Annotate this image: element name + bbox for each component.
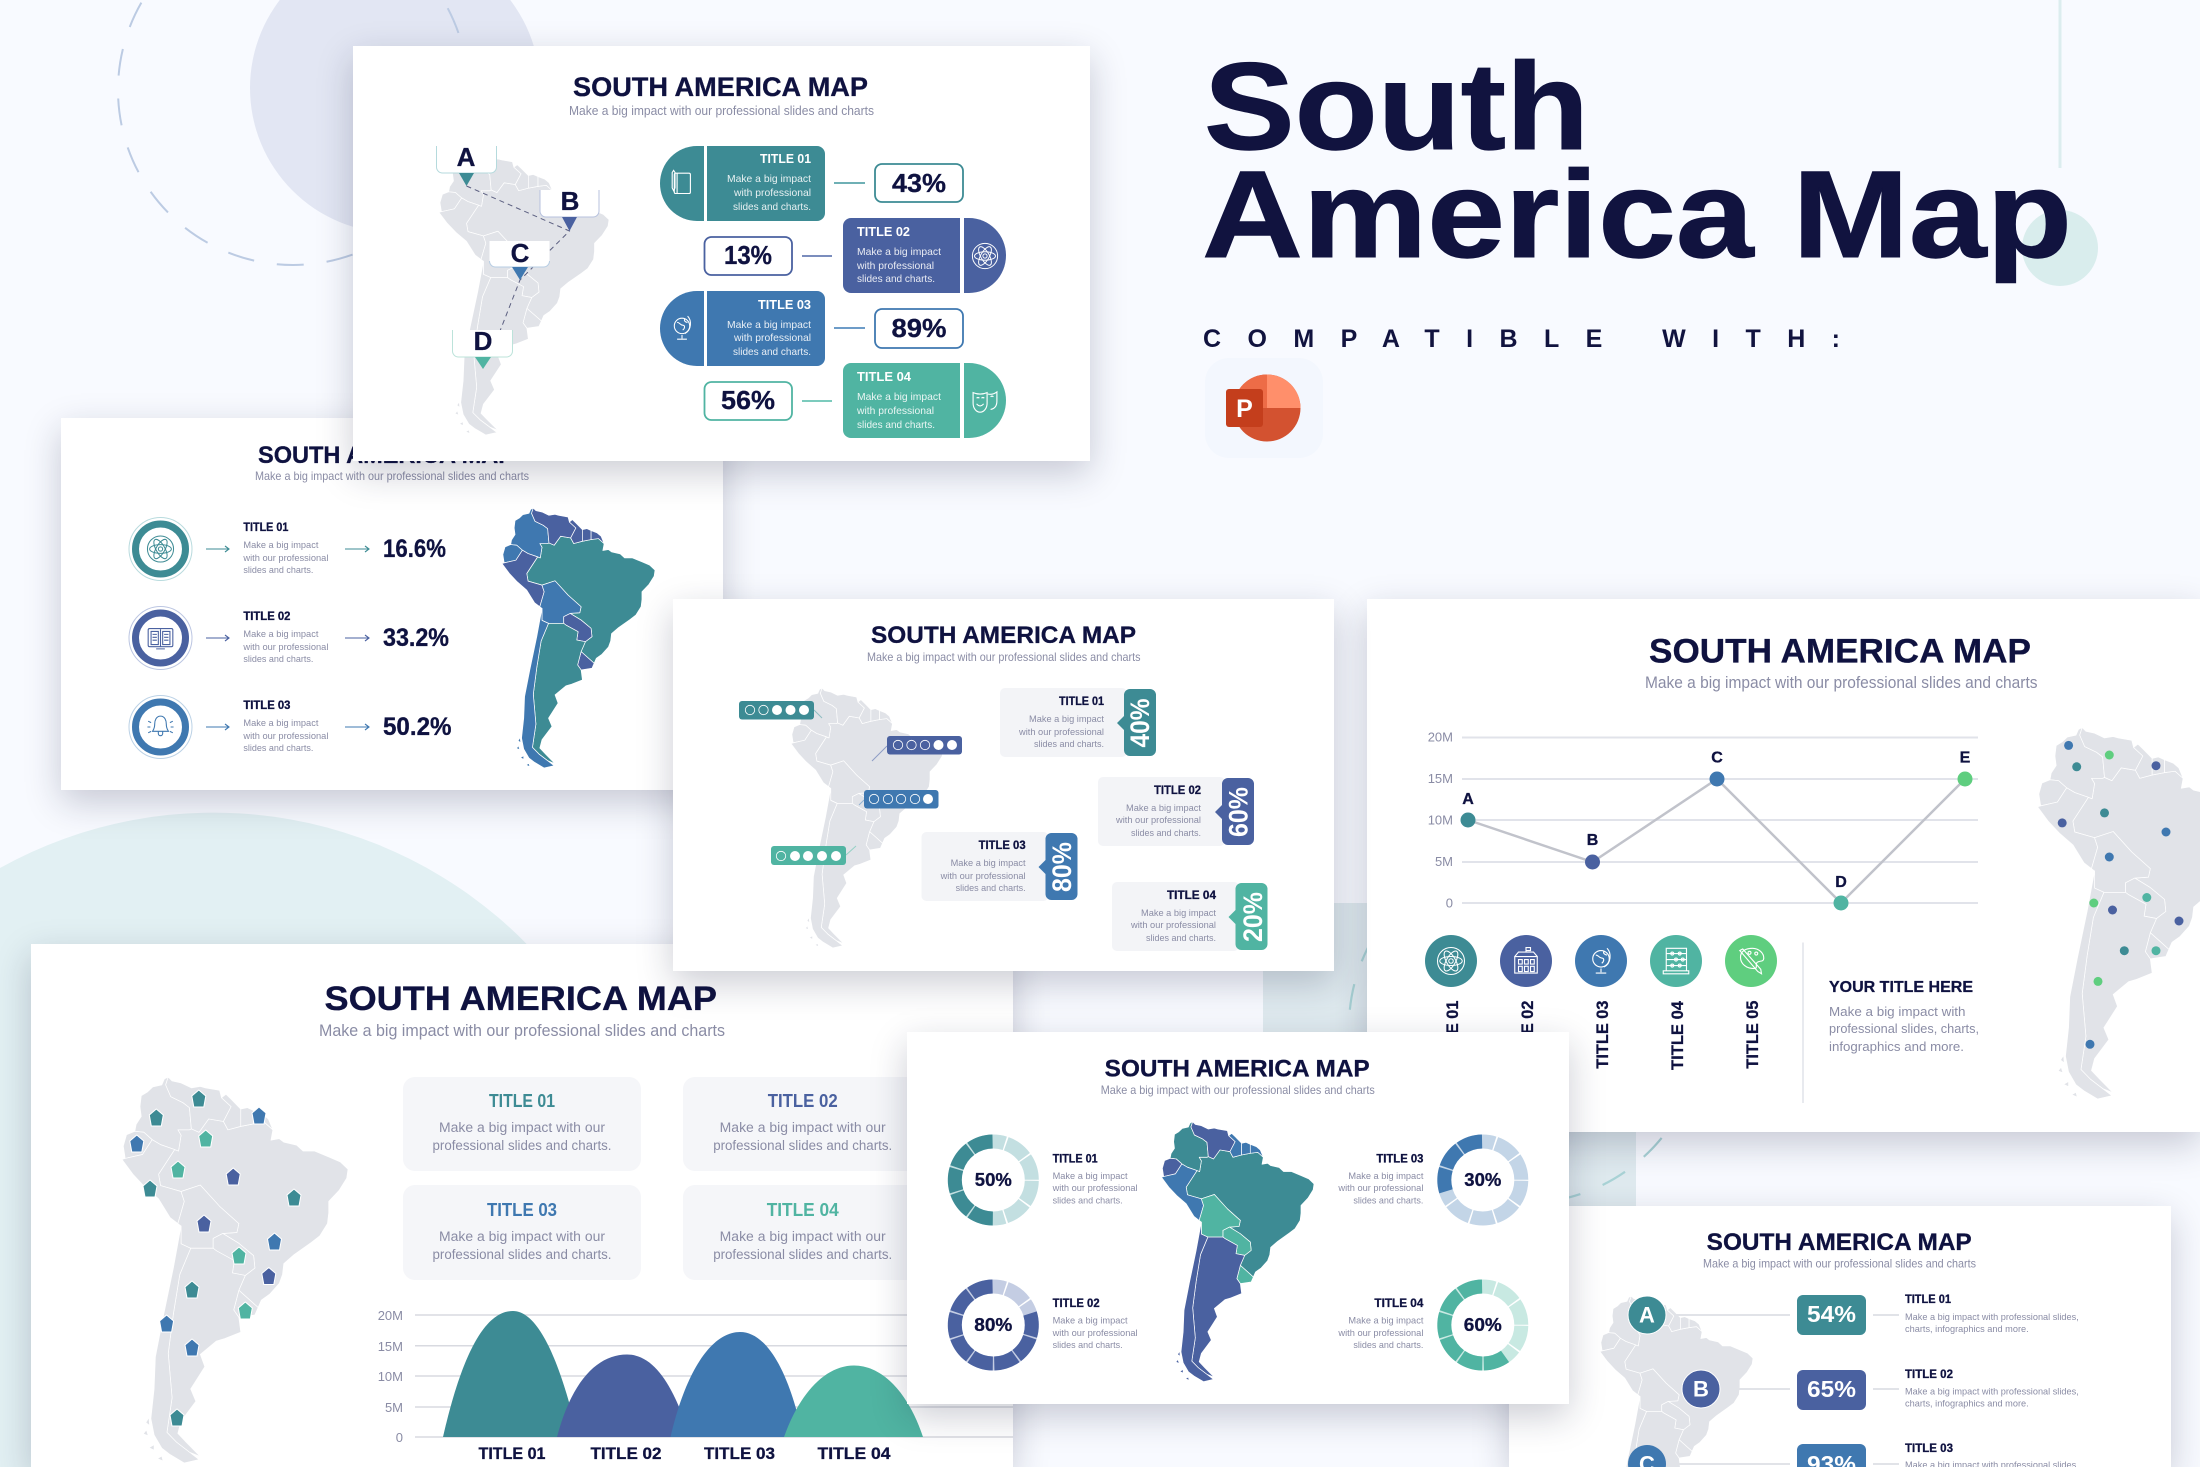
map: grey silhouette: [1600, 1296, 1753, 1467]
text: title 02: Make a big impact: [1053, 1316, 1128, 1327]
row 02: Make a big impact: [243, 629, 319, 640]
block: title 02: [704, 218, 1006, 293]
text: title 02: slides and charts.: [1053, 1340, 1123, 1351]
donut 60%: 60%: [1464, 1315, 1502, 1335]
row B 65%: B: [1693, 1376, 1709, 1402]
slide heading: SOUTH AMERICA MAP: [1105, 1056, 1370, 1083]
line chart: 10M: [1428, 812, 1453, 828]
row C 93%: [1628, 1441, 2079, 1467]
row 01: slides and charts.: [243, 565, 313, 576]
card: title 02: TITLE 02: [768, 1091, 838, 1111]
row 02: 33.2%: [383, 624, 449, 652]
donut 80%: [955, 1286, 1032, 1364]
text: title 01: slides and charts.: [1053, 1196, 1123, 1207]
card: title 01 40%: TITLE 01: [1059, 694, 1104, 708]
text: title 01: Make a big impact: [1053, 1171, 1128, 1182]
text: title 04: with our professional: [1337, 1328, 1423, 1339]
main title: America Map: [1202, 146, 2072, 284]
card: title 02 60%: [1098, 777, 1254, 846]
card: title 01 40%: with our professional: [1018, 727, 1104, 738]
block: title 01: Make a big impact: [727, 173, 811, 185]
route: dashed connector: [466, 186, 570, 331]
text block: your title here: Make a big impact with: [1829, 1004, 1966, 1019]
slide heading: SOUTH AMERICA MAP: [573, 72, 868, 102]
rating pill 1: [739, 701, 822, 720]
row 03: Make a big impact: [243, 718, 319, 729]
pin A: [436, 142, 496, 186]
text: title 03: with our professional: [1337, 1183, 1423, 1194]
card: title 03 80%: TITLE 03: [979, 838, 1026, 852]
card: title 01: [403, 1077, 641, 1171]
block: title 02: 13%: [724, 240, 772, 270]
hill chart: 10M: [378, 1369, 403, 1384]
card: title 01: TITLE 01: [489, 1091, 555, 1111]
pin C: C: [511, 238, 530, 268]
line chart: [1428, 730, 1978, 910]
icon row with rotated labels: TITLE 01: [1443, 1001, 1462, 1069]
card: title 03 80%: [922, 832, 1078, 901]
donut 30%: 30%: [1464, 1170, 1501, 1190]
row 02: [129, 606, 449, 670]
row A 54%: [1628, 1292, 2079, 1335]
donut 50%: [955, 1142, 1032, 1218]
line chart: D: [1835, 874, 1847, 891]
block: title 01: with professional: [733, 187, 811, 199]
text: title 01: with our professional: [1052, 1183, 1138, 1194]
block: title 03: Make a big impact: [727, 319, 811, 331]
icon row with rotated labels: TITLE 05: [1743, 1001, 1762, 1069]
card: title 01 40%: [1000, 688, 1156, 757]
slide heading: [1703, 1229, 1976, 1271]
slide heading: [1645, 632, 2038, 692]
row 01: with our professional: [242, 553, 328, 564]
slide heading: [319, 980, 725, 1040]
text: title 03: TITLE 03: [1376, 1152, 1424, 1166]
rating pill 3: [859, 790, 938, 808]
donut 60%: [1444, 1286, 1521, 1364]
map: coloured countries: [502, 508, 655, 768]
block: title 02: TITLE 02: [857, 225, 910, 239]
hill chart: TITLE 03: [704, 1444, 775, 1463]
hill chart: 20M: [378, 1308, 403, 1323]
card: title 03 80%: 80%: [1047, 842, 1077, 892]
line chart: C: [1711, 750, 1723, 766]
slide heading: Make a big impact with our professional slides and charts: [255, 469, 529, 483]
text block: your title here: professional slides, charts,: [1829, 1021, 1979, 1036]
card: title 02 60%: with our professional: [1115, 815, 1201, 826]
card: title 04 20%: slides and charts.: [1146, 933, 1216, 944]
compatible with label: COMPATIBLE WITH:: [1203, 325, 1840, 353]
card: title 03 80%: Make a big impact: [951, 858, 1026, 869]
block: title 04: TITLE 04: [857, 370, 911, 384]
text block: your title here: YOUR TITLE HERE: [1829, 979, 1973, 996]
row 03: 50.2%: [383, 713, 452, 741]
line chart: 5M: [1435, 854, 1453, 869]
block: title 03: 89%: [892, 313, 946, 343]
hill chart: TITLE 01: [478, 1444, 546, 1463]
map: grey silhouette: [791, 688, 943, 948]
row 01: [129, 518, 446, 580]
card: title 02: Make a big impact with our: [720, 1120, 886, 1135]
map: coloured countries: [1162, 1122, 1314, 1382]
card: title 01: professional slides and charts.: [432, 1138, 612, 1153]
text block: your title here: infographics and more.: [1829, 1039, 1964, 1054]
row C 93%: TITLE 03: [1905, 1441, 1953, 1455]
rating pill 2: [872, 736, 962, 761]
map: grey with dots: [2038, 728, 2200, 1099]
block: title 01: TITLE 01: [760, 152, 811, 166]
card: title 01 40%: slides and charts.: [1034, 739, 1104, 750]
card: title 03: Make a big impact with our: [439, 1229, 606, 1244]
block: title 01: [660, 146, 963, 221]
block: title 04: 56%: [721, 385, 775, 415]
card: title 01 40%: 40%: [1125, 698, 1155, 748]
slide heading: SOUTH AMERICA MAP: [871, 622, 1136, 649]
pin A: A: [457, 142, 476, 172]
map: grey with pentagon markers: [122, 1077, 348, 1463]
card: title 01: Make a big impact with our: [439, 1120, 606, 1135]
block: title 04: with professional: [856, 405, 934, 417]
text: title 02: TITLE 02: [1053, 1296, 1100, 1310]
text: title 04: [1337, 1296, 1424, 1351]
row A 54%: TITLE 01: [1905, 1292, 1951, 1306]
text: title 04: Make a big impact: [1348, 1316, 1424, 1327]
slide heading: Make a big impact with our professional slides and charts: [867, 650, 1140, 664]
card: title 04 20%: 20%: [1238, 892, 1268, 942]
block: title 04: Make a big impact: [857, 391, 941, 403]
card: title 04 20%: [1112, 882, 1268, 951]
block: title 01: 43%: [892, 168, 946, 198]
card: title 02 60%: slides and charts.: [1131, 828, 1201, 839]
slide heading: Make a big impact with our professional slides and charts: [1645, 673, 2038, 692]
pin D: [452, 326, 512, 369]
text: title 01: [1052, 1152, 1138, 1207]
card: title 02: professional slides and charts.: [713, 1138, 892, 1153]
row 01: Make a big impact: [243, 540, 319, 551]
row A 54%: 54%: [1807, 1301, 1856, 1327]
pin B: B: [561, 186, 579, 216]
slide heading: Make a big impact with our professional slides and charts: [1101, 1083, 1375, 1097]
block: title 02: slides and charts.: [857, 273, 935, 285]
slide heading: SOUTH AMERICA MAP: [1707, 1229, 1972, 1256]
text: title 03: slides and charts.: [1353, 1196, 1423, 1207]
row 03: with our professional: [242, 731, 328, 742]
row B 65%: charts, infographics and more.: [1905, 1399, 2029, 1410]
row 02: with our professional: [242, 642, 328, 653]
panel: slide with donut charts around central map: [907, 1032, 1569, 1404]
row 03: [129, 696, 452, 758]
hill chart: TITLE 04: [818, 1444, 891, 1463]
icon: PowerPoint logo: [1205, 358, 1323, 458]
line chart: 15M: [1428, 771, 1453, 786]
slide heading: [255, 442, 529, 483]
card: title 03: professional slides and charts.: [432, 1247, 612, 1262]
block: title 02: Make a big impact: [857, 246, 941, 258]
text: title 01: TITLE 01: [1053, 1152, 1098, 1166]
row 01: TITLE 01: [243, 520, 289, 534]
pin D: D: [474, 326, 492, 356]
row B 65%: TITLE 02: [1905, 1367, 1953, 1381]
donut 80%: 80%: [974, 1315, 1012, 1335]
card: title 02 60%: Make a big impact: [1126, 803, 1201, 814]
hill chart: TITLE 02: [590, 1444, 662, 1463]
slide heading: Make a big impact with our professional slides and charts: [569, 103, 874, 118]
card: title 04: Make a big impact with our: [720, 1229, 886, 1244]
block: title 03: TITLE 03: [758, 298, 811, 312]
card: title 03 80%: with our professional: [940, 871, 1026, 882]
hill chart: [378, 1308, 1013, 1463]
block: title 03: with professional: [733, 332, 811, 344]
row 03: slides and charts.: [243, 743, 313, 754]
row 03: TITLE 03: [243, 698, 291, 712]
slide heading: SOUTH AMERICA MAP: [324, 980, 717, 1018]
pin B: [540, 186, 599, 231]
card: title 03: [403, 1185, 641, 1280]
row A 54%: Make a big impact with professional slides,: [1905, 1312, 2079, 1323]
card: title 03: TITLE 03: [487, 1200, 557, 1220]
rating pill 4: [771, 846, 856, 865]
text: title 04: TITLE 04: [1374, 1296, 1424, 1310]
card: title 04 20%: with our professional: [1130, 920, 1216, 931]
card: title 04: TITLE 04: [767, 1200, 839, 1220]
text: title 03: Make a big impact: [1348, 1171, 1424, 1182]
slide heading: SOUTH AMERICA MAP: [258, 442, 514, 469]
panel: slide with rating pills and percent cards: [673, 599, 1334, 971]
panel: slide with lettered map pins and title blocks: [353, 46, 1090, 461]
row 02: TITLE 02: [243, 609, 291, 623]
hill chart: 5M: [385, 1400, 403, 1415]
row A 54%: A: [1639, 1302, 1655, 1328]
text: title 03: [1337, 1152, 1424, 1207]
panel: slide with three percent rows and coloured map: [61, 418, 723, 790]
card: title 01 40%: Make a big impact: [1029, 714, 1104, 725]
card: title 02 60%: TITLE 02: [1154, 783, 1201, 797]
hill chart: 15M: [378, 1339, 403, 1354]
row 02: slides and charts.: [243, 654, 313, 665]
row B 65%: [1682, 1367, 2079, 1410]
line chart: 20M: [1428, 730, 1453, 744]
card: title 02: [683, 1077, 921, 1171]
row A 54%: charts, infographics and more.: [1905, 1324, 2029, 1335]
row 01: 16.6%: [383, 535, 446, 563]
text: title 02: with our professional: [1052, 1328, 1138, 1339]
icon row with rotated labels: TITLE 02: [1518, 1001, 1537, 1069]
card: title 04: [683, 1185, 921, 1280]
card: title 04 20%: Make a big impact: [1141, 908, 1216, 919]
icon: PowerPoint logo: P: [1236, 395, 1253, 423]
main title: South: [1204, 38, 1589, 176]
block: title 04: slides and charts.: [857, 419, 935, 431]
block: title 01: slides and charts.: [733, 201, 811, 213]
line chart: E: [1960, 750, 1971, 766]
line chart: B: [1587, 832, 1598, 849]
pin C: [490, 238, 550, 280]
block: title 02: with professional: [856, 260, 934, 272]
card: title 02 60%: 60%: [1224, 787, 1254, 837]
row B 65%: Make a big impact with professional slides,: [1905, 1386, 2079, 1397]
icon row with rotated labels: [1425, 935, 1777, 1070]
row B 65%: 65%: [1807, 1376, 1856, 1402]
slide heading: Make a big impact with our professional slides and charts: [319, 1021, 725, 1040]
slide heading: [569, 72, 874, 118]
line chart: A: [1462, 791, 1474, 808]
icon row with rotated labels: TITLE 03: [1593, 1001, 1612, 1069]
line chart: 0: [1446, 896, 1453, 910]
block: title 04: [704, 363, 1006, 438]
card: title 03 80%: slides and charts.: [956, 883, 1026, 894]
icon row with rotated labels: TITLE 04: [1668, 1000, 1687, 1070]
slide heading: SOUTH AMERICA MAP: [1649, 632, 2031, 670]
panel: slide with line chart and dotted map: [1367, 599, 2200, 1132]
card: title 04 20%: TITLE 04: [1167, 888, 1216, 902]
text block: your title here: [1803, 942, 1979, 1103]
slide heading: Make a big impact with our professional slides and charts: [1703, 1257, 1976, 1271]
block: title 03: [660, 291, 963, 366]
slide heading: [867, 622, 1140, 664]
text: title 02: [1052, 1296, 1138, 1351]
card: title 04: professional slides and charts.: [713, 1247, 892, 1262]
panel: slide with info cards and hill chart: [31, 944, 1013, 1467]
donut 50%: 50%: [975, 1170, 1012, 1190]
map: grey silhouette: [439, 152, 609, 435]
text: title 04: slides and charts.: [1353, 1340, 1423, 1351]
panel: slide with lettered rows and percent badges: [1509, 1206, 2171, 1467]
slide heading: [1101, 1056, 1375, 1097]
block: title 03: slides and charts.: [733, 346, 811, 358]
donut 30%: [1444, 1142, 1521, 1218]
hill chart: 0: [396, 1430, 403, 1445]
